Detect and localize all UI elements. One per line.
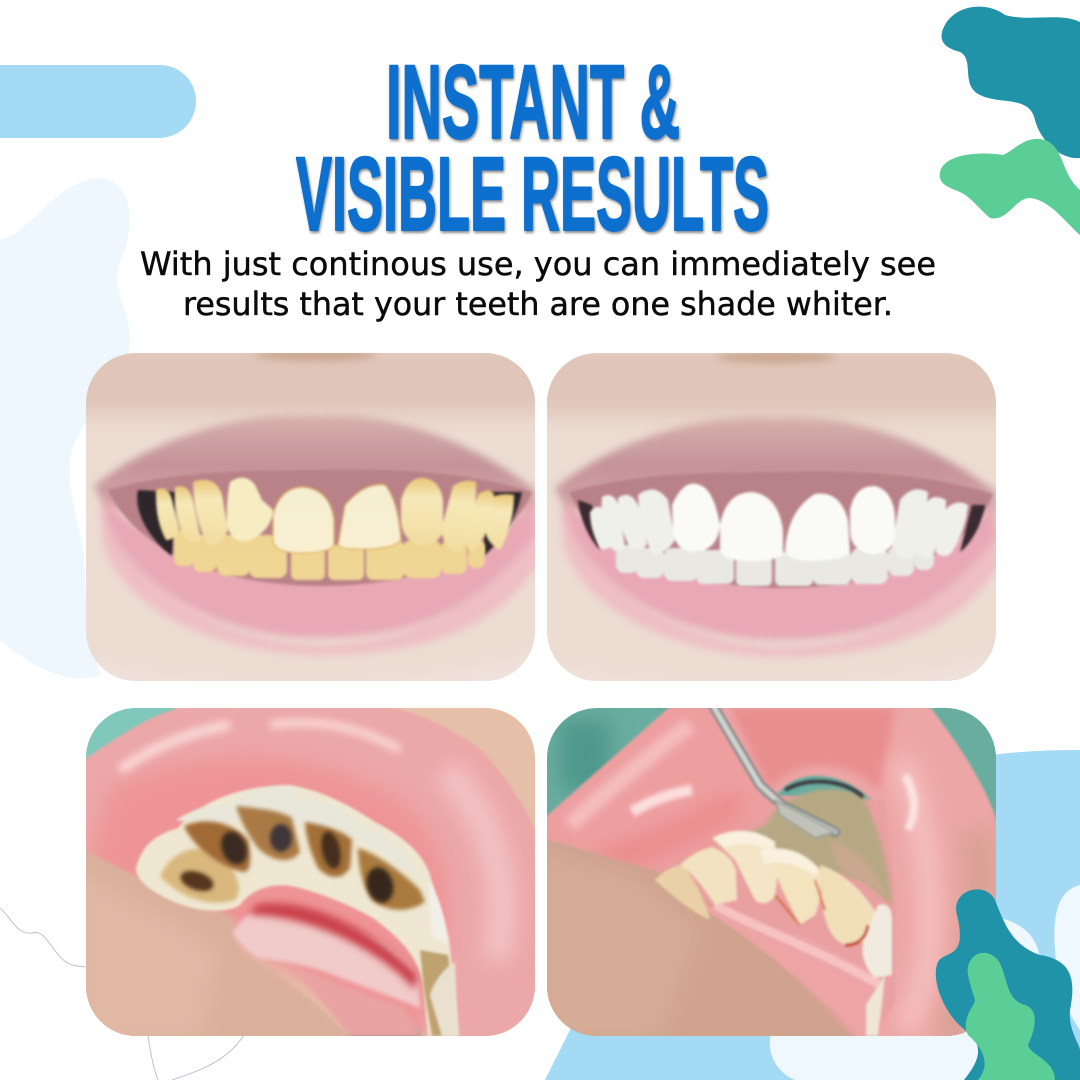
teeth bbox=[655, 831, 892, 1036]
background blob: pale left bbox=[0, 178, 130, 679]
mirror and back of mouth bbox=[748, 786, 894, 905]
dental instrument bbox=[712, 704, 835, 838]
background blob: pale bottom right bbox=[770, 885, 1080, 1080]
decorative thin line bbox=[0, 908, 259, 1080]
panel: after smile, white teeth bbox=[547, 353, 996, 681]
inner cheek and right lip bbox=[705, 700, 1000, 1040]
panel: before smile, yellow teeth bbox=[86, 353, 535, 681]
panel: teeth with tartar stains bbox=[70, 700, 540, 1045]
panel: dental cleaning with instrument bbox=[540, 700, 1000, 1045]
subtitle: results that your teeth are one shade whiter. bbox=[183, 285, 893, 323]
upper left lip bbox=[540, 704, 770, 875]
white teeth bbox=[590, 484, 968, 586]
inner lower lip and gum bbox=[233, 909, 420, 1008]
subtitle bbox=[140, 245, 936, 323]
skin lower left bbox=[540, 838, 860, 1045]
skin lower left bbox=[86, 850, 346, 1036]
mouth floor bbox=[307, 982, 420, 1036]
blob: green bottom right bbox=[966, 953, 1055, 1080]
subtitle: With just continous use, you can immediately see bbox=[140, 245, 936, 283]
lower gum bbox=[705, 905, 796, 976]
lip bbox=[76, 708, 540, 1040]
blob: green top right bbox=[940, 139, 1080, 235]
title: INSTANT & bbox=[386, 44, 680, 161]
background blob: light blue bottom right bbox=[545, 750, 1080, 1080]
background pill: light blue bbox=[0, 65, 196, 138]
yellow teeth bbox=[156, 478, 514, 580]
mouth interior behind teeth bbox=[650, 795, 895, 1040]
teal corner bbox=[86, 708, 177, 760]
blob: teal bottom right bbox=[936, 889, 1080, 1080]
tartar teeth bbox=[136, 785, 459, 1036]
blob: teal top right bbox=[942, 7, 1080, 158]
title bbox=[296, 44, 769, 253]
